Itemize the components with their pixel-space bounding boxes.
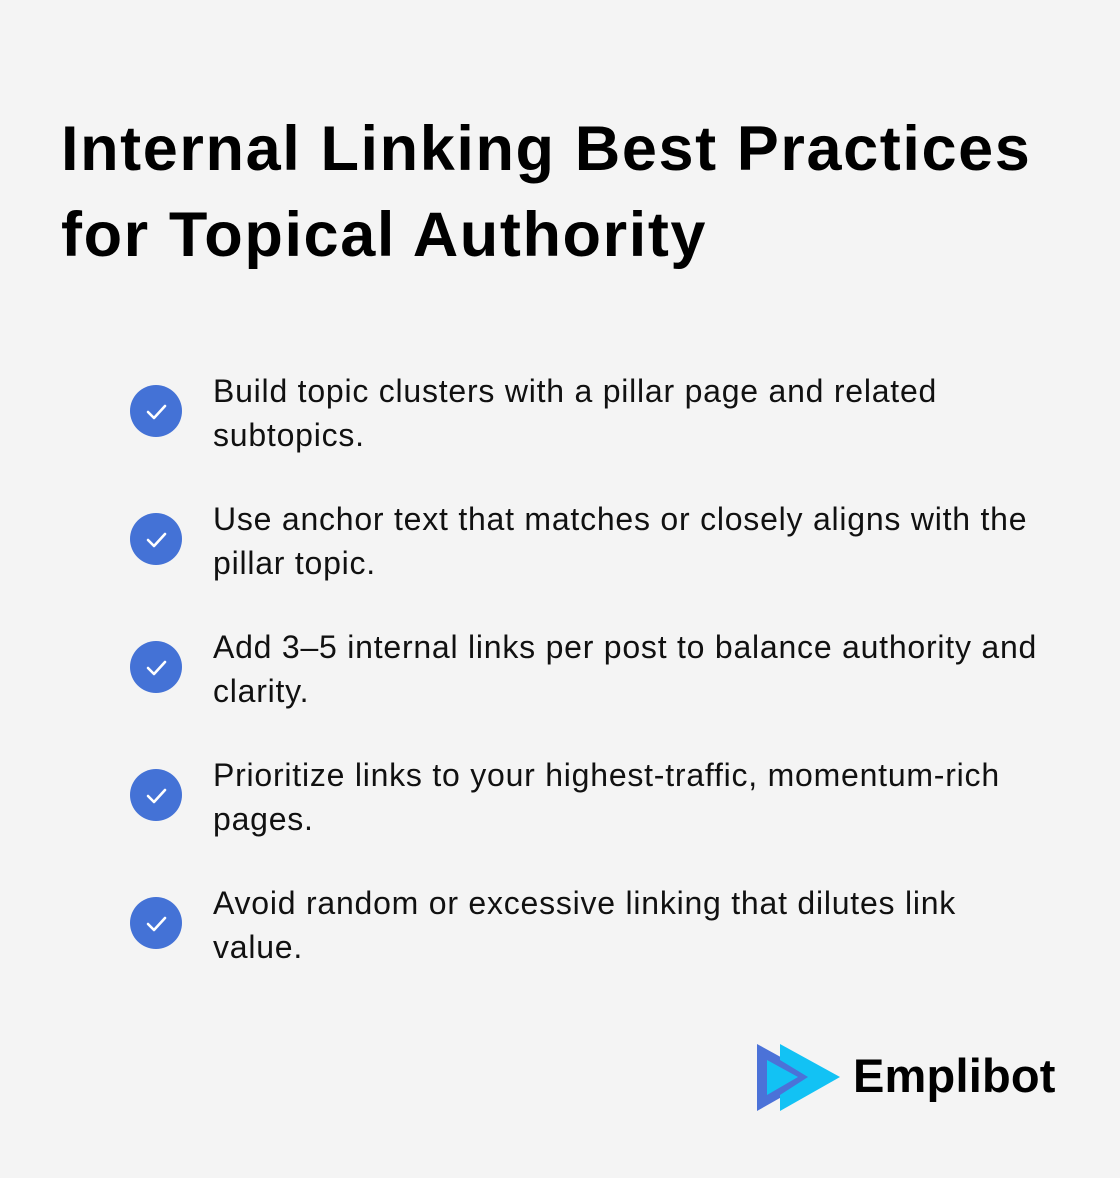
item 4 — [130, 757, 1000, 837]
title: Internal Linking Best Practices — [61, 114, 1031, 184]
item 4: pages. — [213, 801, 314, 837]
icon: check — [130, 769, 182, 821]
item 3: clarity. — [213, 673, 309, 709]
icon: check — [130, 897, 182, 949]
item 1: Build topic clusters with a pillar page and related — [213, 373, 937, 409]
item 4: Prioritize links to your highest-traffic, momentum-rich — [213, 757, 1000, 793]
item 5 — [130, 885, 956, 965]
item 1: subtopics. — [213, 417, 365, 453]
item 5: value. — [213, 929, 303, 965]
item 1 — [130, 373, 937, 453]
logo — [757, 1044, 1056, 1111]
icon: check — [130, 641, 182, 693]
title — [61, 114, 1031, 270]
item 3 — [130, 629, 1037, 709]
item 2: pillar topic. — [213, 545, 376, 581]
item 2: Use anchor text that matches or closely aligns with the — [213, 501, 1027, 537]
icon: logo triangles — [757, 1044, 840, 1111]
icon: check — [130, 513, 182, 565]
item 2 — [130, 501, 1027, 581]
icon: check — [130, 385, 182, 437]
item 3: Add 3–5 internal links per post to balance authority and — [213, 629, 1037, 665]
logo text: Emplibot — [853, 1049, 1056, 1102]
item 5: Avoid random or excessive linking that dilutes link — [213, 885, 956, 921]
title: for Topical Authority — [61, 200, 707, 270]
